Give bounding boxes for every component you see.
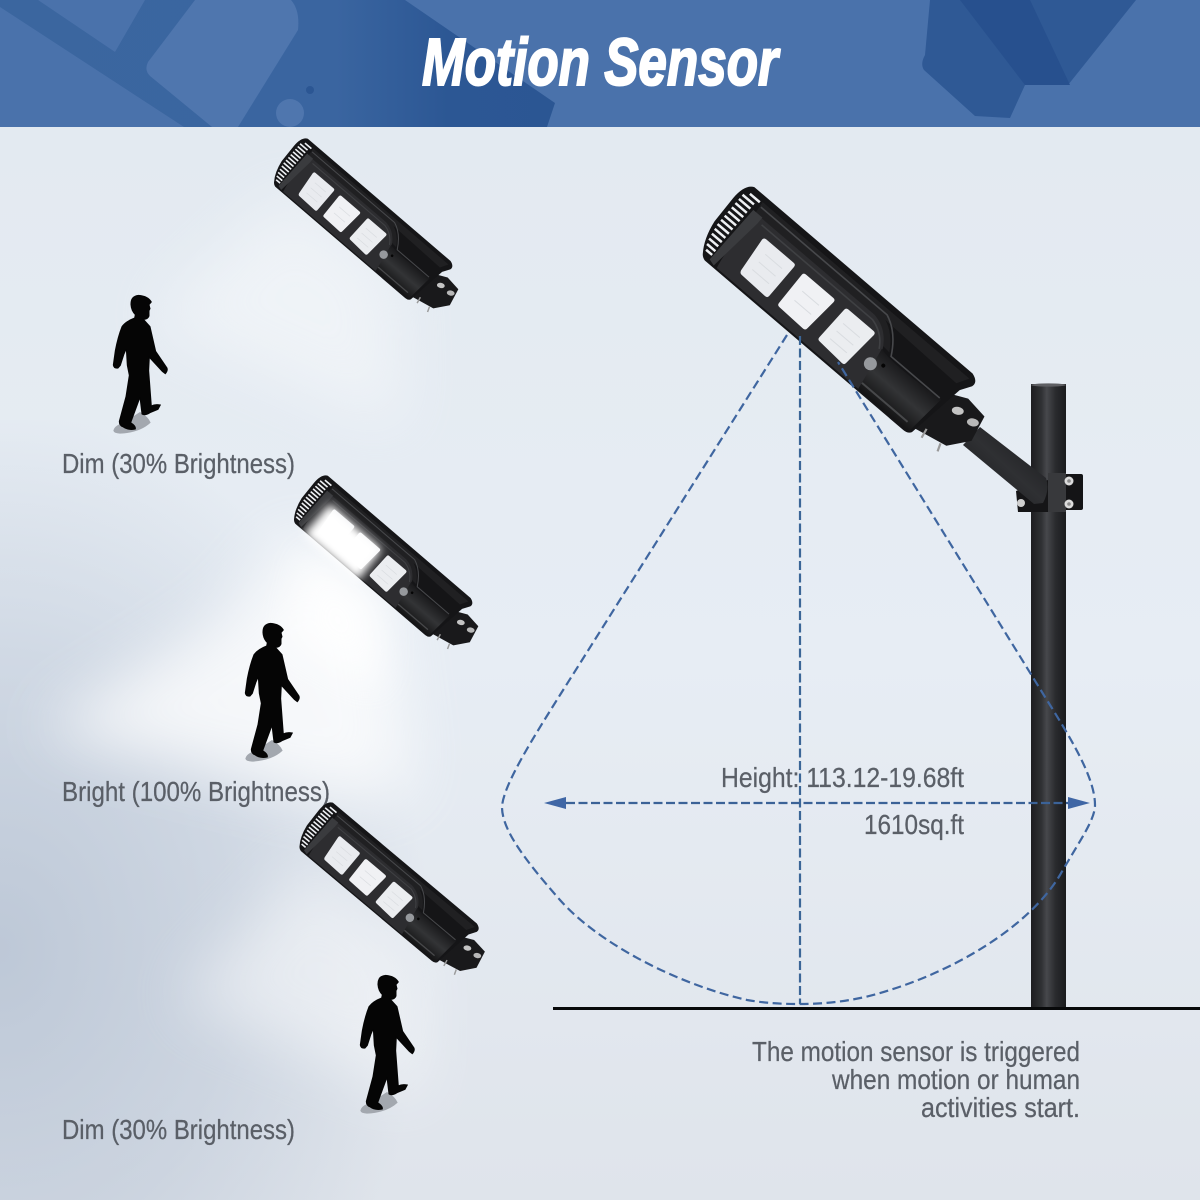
ghosted lamp left	[0, 0, 555, 127]
sensing range cone dashed outline	[502, 335, 1095, 1004]
description text	[752, 1036, 1080, 1123]
lamp: dim 2	[291, 799, 498, 986]
person: dim 2	[360, 975, 414, 1114]
ground line	[553, 1007, 1200, 1010]
label: dim 2: Dim (30% Brightness)	[62, 1114, 295, 1145]
large lamp	[690, 181, 1005, 468]
dim light glow bottom	[180, 860, 420, 1100]
lamp: bright	[284, 472, 492, 662]
ghosted lamp right	[922, 0, 1136, 118]
vertical dashed axis	[799, 336, 801, 1004]
description text: The motion sensor is triggered	[752, 1036, 1080, 1067]
horizontal range arrow	[544, 797, 1090, 809]
bright light glow	[40, 530, 410, 800]
background shading lower left	[0, 420, 440, 1200]
height label: Height: 113.12-19.68ft	[721, 762, 964, 793]
description text: when motion or human	[831, 1064, 1080, 1095]
area label: 1610sq.ft	[864, 809, 964, 840]
person: bright	[245, 623, 299, 762]
description text: activities start.	[921, 1092, 1080, 1123]
lamp: dim 1	[266, 135, 472, 323]
pole with arm and clamp	[963, 383, 1083, 1007]
person: dim 1	[113, 295, 167, 434]
header banner	[0, 0, 1200, 127]
dim light glow top	[150, 190, 400, 430]
label: bright: Bright (100% Brightness)	[62, 776, 330, 807]
label: dim 1: Dim (30% Brightness)	[62, 448, 295, 479]
title: Motion Sensor	[422, 25, 781, 100]
